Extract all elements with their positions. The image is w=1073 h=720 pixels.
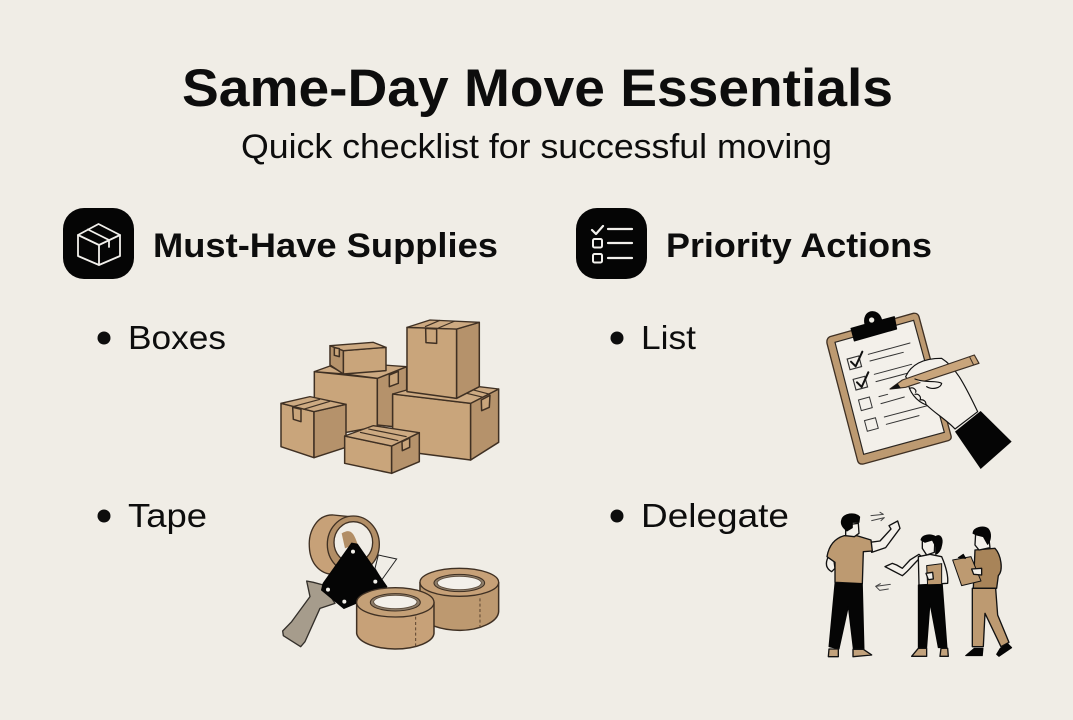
bullet: boxes: Boxes <box>128 319 226 356</box>
bullet: tape <box>98 497 207 534</box>
panel: priority actions <box>576 208 1012 657</box>
illustration: three people delegating <box>826 512 1012 657</box>
icon: box badge <box>63 208 134 279</box>
pencil <box>890 355 979 404</box>
tall top-right box <box>407 320 479 398</box>
middle box <box>314 365 407 438</box>
back right tape roll <box>420 568 499 630</box>
heading: priority actions: Priority Actions <box>666 227 932 265</box>
clipboard clip <box>851 312 897 341</box>
dispenser roll <box>309 515 379 574</box>
illustration: clipboard and writing hand <box>827 312 1012 469</box>
hand <box>906 358 978 429</box>
clipboard board <box>827 313 951 464</box>
icon: checklist badge <box>576 208 647 279</box>
checklist rows <box>847 343 928 431</box>
middle woman with folder <box>885 535 948 656</box>
panel: must-have supplies <box>63 208 499 649</box>
dispenser black plate <box>322 543 387 608</box>
bullet: delegate: Delegate <box>641 497 789 534</box>
small top box <box>330 342 386 374</box>
dispenser handle <box>283 581 335 647</box>
title: Same-Day Move Essentials <box>182 59 893 118</box>
illustration: tape dispenser and rolls <box>283 515 499 649</box>
large right box <box>393 387 499 460</box>
black cuff <box>955 411 1012 469</box>
left box <box>281 397 346 458</box>
left man gesturing <box>826 514 900 657</box>
bullet: list <box>610 319 696 356</box>
right man with clipboard <box>953 527 1012 656</box>
subtitle: Quick checklist for successful moving <box>241 128 832 166</box>
bullet: tape: Tape <box>128 497 207 534</box>
clipboard paper <box>835 320 944 454</box>
front low box <box>345 426 419 473</box>
bullet: list: List <box>641 319 696 356</box>
front tape roll <box>357 588 434 649</box>
heading: must-have supplies: Must-Have Supplies <box>153 227 498 265</box>
motion arrows <box>871 512 890 590</box>
illustration: stack of cardboard boxes <box>281 320 499 473</box>
cutting blade <box>375 555 397 580</box>
